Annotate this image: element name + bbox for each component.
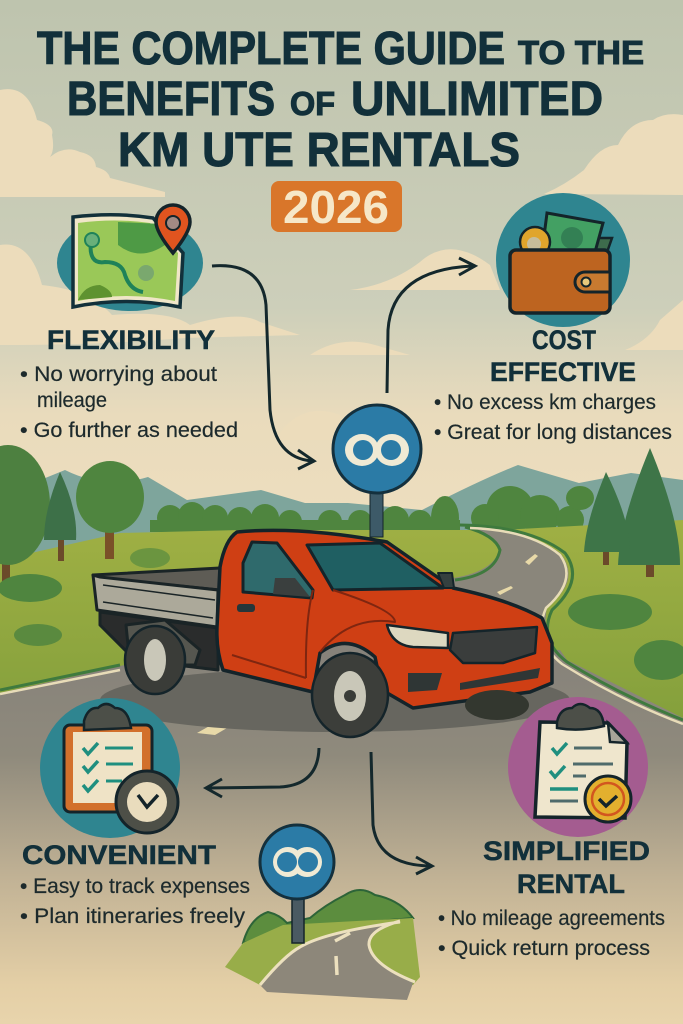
arrow: flexibility to sign [212,266,314,469]
ute cab and body [217,530,552,708]
panel: convenient [20,698,250,928]
text: flexibility bullets: mileage [37,389,107,412]
wheels [125,626,529,737]
heading: convenient: CONVENIENT [22,840,217,870]
lower grille [460,668,540,690]
text: cost bullets [434,391,672,444]
small bushes [243,890,413,943]
road edge lines [0,525,683,720]
small infinity sign [260,825,334,899]
title: BENEFITS [67,73,275,126]
text: simplified bullets [438,907,665,960]
road ground [0,640,683,1024]
arrow: sign to cost [387,258,475,393]
small infinity sign: ∞ [297,862,298,864]
driver seat [273,578,310,597]
icon: clipboard and clock [40,698,180,838]
small sign post [292,897,304,943]
text: cost bullets: • No excess km charges [434,391,656,414]
truck shadow [100,668,570,732]
text: simplified bullets: • Quick return process [438,937,650,960]
heading: simplified rental [483,836,650,899]
panel: simplified rental [438,697,665,960]
heading: simplified rental: RENTAL [517,869,625,899]
small grass [225,918,420,985]
icon: document with check [508,697,648,837]
icon: infinity: ∞ [377,451,378,453]
title: KM UTE RENTALS [118,124,520,177]
heading: cost effective [490,325,636,387]
far mirror [438,573,454,588]
heading: cost effective: EFFECTIVE [490,357,636,387]
curve road [400,525,568,680]
arrow: truck to convenient [206,748,319,797]
arrow: truck to simplified [371,752,432,874]
text: flexibility bullets [20,363,238,442]
heading: simplified rental: SIMPLIFIED [483,836,650,866]
distant hills [0,465,683,560]
text: convenient bullets: • Plan itineraries freely [20,905,246,928]
road dash markings [197,554,538,735]
truck [93,530,570,737]
text: cost bullets: • Great for long distances [434,421,672,444]
treeline [150,486,594,540]
panel: cost effective [434,193,672,444]
windshield [307,543,443,590]
year badge: 2026 [283,181,389,233]
small road scene with sign [225,825,420,1000]
trees left [0,445,170,646]
title: UNLIMITED [351,73,603,126]
clouds [0,89,683,440]
icon: map with pin [57,205,203,311]
text: simplified bullets: • No mileage agreements [438,907,665,930]
ute tray and chassis [93,568,220,670]
grille [450,627,537,663]
fog light [408,673,442,692]
text: flexibility bullets: • Go further as needed [20,419,238,442]
background sky [0,0,683,560]
trees right [568,448,683,680]
door lines and handle [232,590,395,678]
heading: cost effective: COST [532,325,596,355]
side window [243,542,313,598]
title: THE COMPLETE GUIDE [37,22,505,74]
headlight [387,625,448,648]
title [37,22,644,177]
text: convenient bullets [20,875,250,928]
text: flexibility bullets: • No worrying about [20,363,217,386]
icon: wallet [496,193,630,327]
title: OF [290,85,335,122]
panel: flexibility [20,205,238,442]
small road [260,922,413,1000]
infinity road sign [333,405,421,537]
heading: flexibility: FLEXIBILITY [47,325,215,355]
title: TO THE [518,34,644,71]
text: convenient bullets: • Easy to track expenses [20,875,250,898]
grass [0,520,683,720]
